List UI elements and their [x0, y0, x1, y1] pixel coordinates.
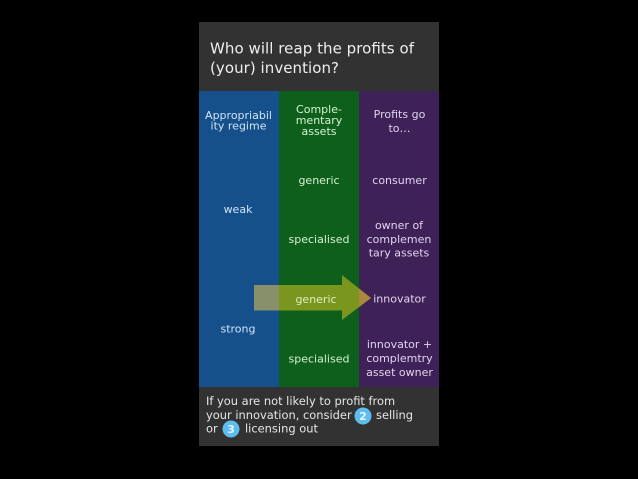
- heading: appropriability regime: Appropriabil: [205, 109, 272, 122]
- label: specialised (top): specialised: [289, 233, 349, 246]
- heading: appropriability regime: [205, 109, 272, 132]
- panel: complementary assets column: [279, 91, 359, 387]
- label: weak: weak: [224, 203, 253, 216]
- heading: profits go to: [374, 108, 426, 135]
- heading: complementary assets: [296, 103, 343, 138]
- label: innovator + complementary asset owner: asset owner: [366, 366, 433, 379]
- footer text: licensing out: [245, 422, 318, 436]
- heading: complementary assets: mentary: [296, 114, 343, 127]
- label: owner of complementary assets: tary assets: [369, 246, 430, 260]
- footer text: your innovation, consider: [206, 408, 352, 422]
- icon: number 3 badge: 3: [227, 423, 235, 436]
- title: [210, 40, 415, 77]
- arrow: highlighted route to innovator: [254, 275, 371, 320]
- label: owner of complementary assets: complemen: [367, 233, 431, 246]
- label: strong: strong: [220, 322, 256, 336]
- panel: infographic background: [199, 22, 439, 446]
- icon: number 3 badge: [222, 420, 240, 438]
- label: innovator: innovator: [373, 292, 426, 306]
- icon: number 2 badge: [354, 408, 372, 424]
- label: innovator + complementary asset owner: complemtry: [366, 352, 433, 365]
- footer text: If you are not likely to profit from: [206, 394, 395, 408]
- label: innovator + complementary asset owner: innovator +: [367, 338, 432, 351]
- icon: number 2 badge: 2: [359, 410, 367, 423]
- label: specialised (bottom): specialised: [289, 352, 349, 366]
- label: innovator + complementary asset owner: [366, 338, 433, 379]
- heading: profits go to: to…: [388, 122, 411, 135]
- label: owner of complementary assets: [367, 219, 431, 260]
- footer text: selling: [376, 408, 413, 422]
- label: owner of complementary assets: owner of: [375, 219, 424, 232]
- title: (your) invention?: [210, 59, 339, 77]
- footer text: [206, 394, 413, 436]
- heading: complementary assets: Comple-: [296, 103, 342, 116]
- label: generic (top): generic: [298, 174, 340, 187]
- heading: profits go to: Profits go: [374, 108, 426, 121]
- title: Who will reap the profits of: [210, 40, 415, 58]
- heading: appropriability regime: ity regime: [211, 120, 267, 132]
- heading: complementary assets: assets: [301, 125, 337, 138]
- label: consumer: consumer: [372, 174, 427, 187]
- label: generic (highlighted): generic: [295, 293, 337, 306]
- panel: profits go to column: [359, 91, 439, 387]
- footer text: or: [206, 422, 218, 436]
- panel: appropriability regime column: [199, 91, 279, 387]
